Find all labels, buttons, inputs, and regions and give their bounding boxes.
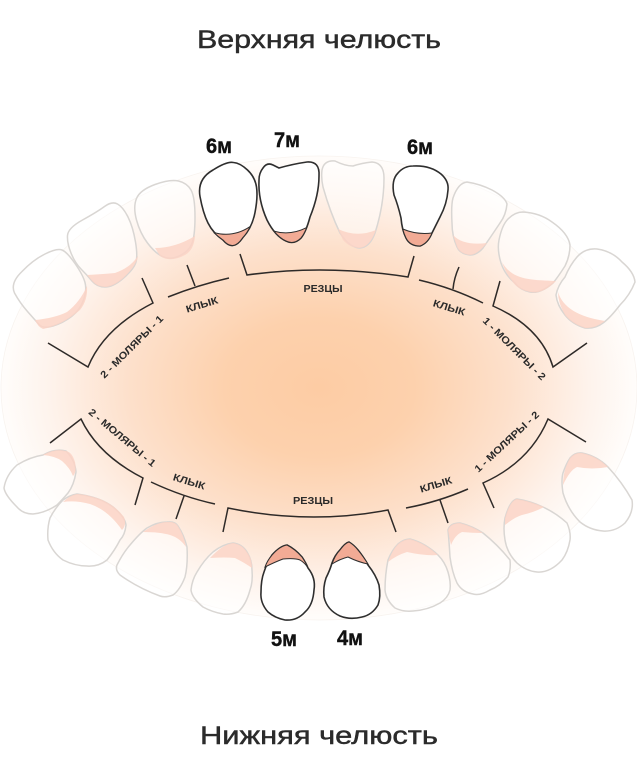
title: upper jaw: Верхняя челюсть xyxy=(197,26,441,54)
title: lower jaw: Нижняя челюсть xyxy=(200,722,438,750)
label: upper molars right: 1 - МОЛЯРЫ - 2 xyxy=(480,316,548,383)
background glow xyxy=(1,156,637,620)
tooth: upper central incisor right xyxy=(322,161,384,248)
tooth: upper first molar right xyxy=(498,212,570,293)
tooth: lower lateral incisor right xyxy=(385,539,450,611)
label: lower canine left: КЛЫК xyxy=(171,472,207,493)
tooth: upper lateral incisor left, 6 months xyxy=(200,162,257,246)
tooth: upper first molar left xyxy=(67,203,138,287)
label: upper canine left: КЛЫК xyxy=(185,295,221,316)
tooth: upper second molar left xyxy=(13,250,87,329)
age: 5 months lower: 5м xyxy=(271,628,297,651)
age: 6 months upper left: 6м xyxy=(206,135,232,158)
tooth: lower second molar left xyxy=(4,450,76,514)
age: 7 months upper: 7м xyxy=(274,129,300,152)
tooth: upper second molar right xyxy=(556,249,635,328)
brackets: lower jaw xyxy=(50,419,586,532)
age: 4 months lower: 4м xyxy=(337,627,363,650)
tooth: lower first molar right xyxy=(504,499,570,572)
tooth: lower first molar left xyxy=(48,494,126,566)
tooth: upper canine right xyxy=(452,182,507,255)
label: upper molars left: 2 - МОЛЯРЫ - 1 xyxy=(99,313,166,381)
label: lower canine right: КЛЫК xyxy=(419,475,455,496)
label: lower molars left: 2 - МОЛЯРЫ - 1 xyxy=(86,407,158,470)
tooth: lower canine right xyxy=(448,523,510,594)
tooth: lower canine left xyxy=(116,522,187,597)
lower teeth xyxy=(4,450,632,620)
tooth: upper canine left xyxy=(135,180,195,259)
age: 6 months upper right: 6м xyxy=(407,136,433,159)
tooth: upper central incisor left, 7 months xyxy=(259,162,319,242)
brackets: upper jaw xyxy=(48,254,587,367)
label: lower molars right: 1 - МОЛЯРЫ - 2 xyxy=(473,409,542,475)
tooth: upper lateral incisor right, 6 months xyxy=(393,166,448,246)
upper teeth xyxy=(13,161,635,329)
label: upper incisors: РЕЗЦЫ xyxy=(304,284,343,295)
tooth: lower central incisor right, 4 months xyxy=(324,542,380,618)
label: upper canine right: КЛЫК xyxy=(431,298,467,319)
tooth: lower central incisor left, 5 months xyxy=(261,545,314,620)
tooth: lower second molar right xyxy=(562,453,632,531)
tooth: lower lateral incisor left xyxy=(191,543,252,614)
label: lower incisors: РЕЗЦЫ xyxy=(293,496,333,507)
